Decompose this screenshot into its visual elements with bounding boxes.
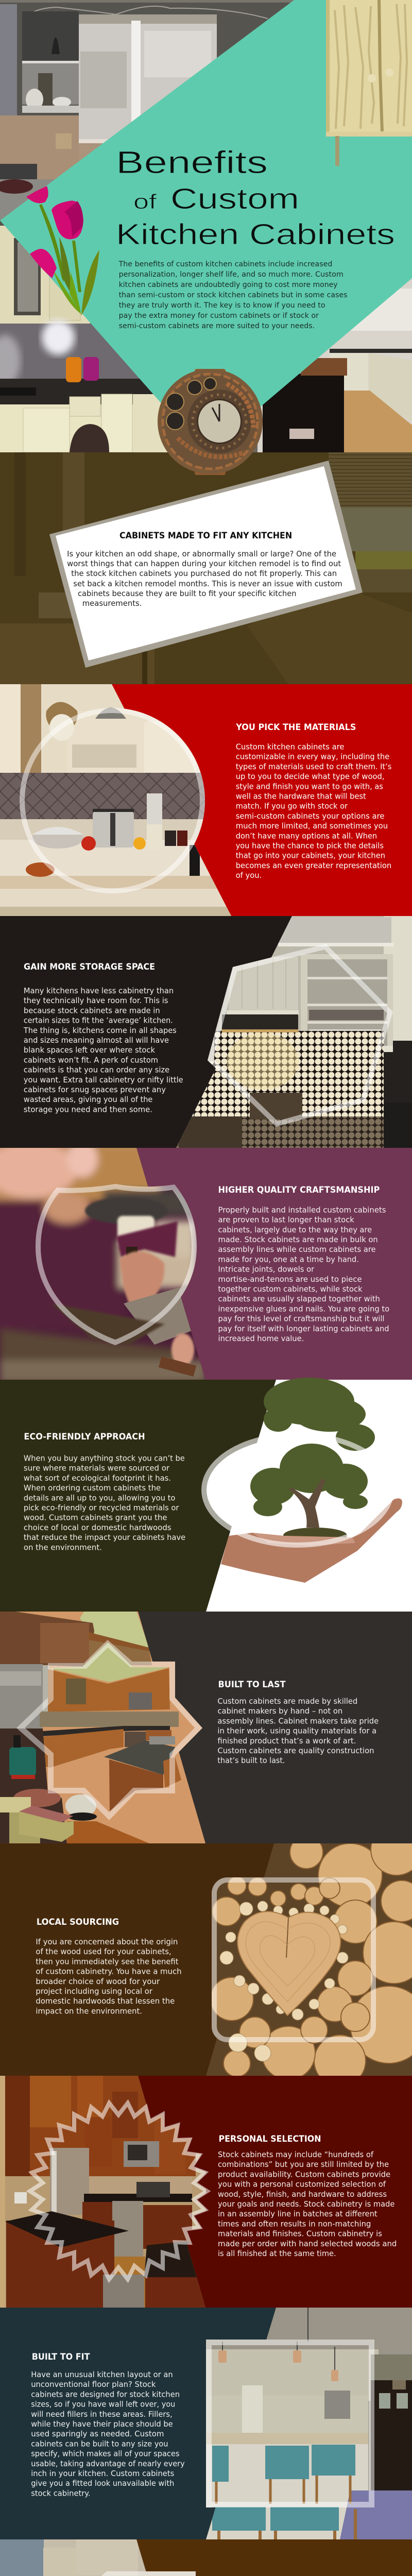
body text: cabinets are usually slapped together with (218, 1294, 380, 1303)
body text: are proven to last longer than stock (218, 1215, 354, 1225)
panel: local sourcing (0, 1843, 412, 2076)
body text: impact on the environment. (36, 2006, 142, 2015)
white photo background (206, 1380, 412, 1612)
body text: unconventional floor plan? Stock (31, 2380, 156, 2389)
panel: you pick the materials (0, 684, 412, 916)
card text: the stock kitchen cabinets you purchased do not fit properly. This can (71, 569, 337, 578)
ring (15, 2574, 193, 2576)
body text: of you. (236, 871, 262, 880)
ring fill (207, 1437, 389, 1543)
body text: blank spaces left over where stock (24, 1045, 155, 1055)
card text: set back a kitchen remodel months. This is never an issue with custom (73, 579, 342, 588)
body text: materials and finishes. Custom cabinetry is (218, 2229, 382, 2239)
heading: YOU PICK THE MATERIALS (235, 722, 356, 733)
body text: sizes, so if you have wall left over, you (31, 2400, 175, 2409)
body text (218, 1205, 389, 1343)
body text: domestic hardwoods that lessen the (36, 1996, 175, 2006)
intro text: The benefits of custom kitchen cabinets include increased (118, 260, 332, 268)
photo: cream kitchen with range hood (0, 2539, 206, 2576)
panel: cabinets made to fit (0, 452, 412, 684)
body text (24, 1454, 185, 1552)
panel: built to last (0, 1612, 412, 1843)
body text: product availability. Custom cabinets provide (218, 2170, 390, 2179)
intro text: pay the extra money for custom cabinets or if stock or (119, 312, 319, 320)
body text: choice of local or domestic hardwoods (24, 1523, 171, 1532)
panel: eco-friendly approach (0, 1378, 412, 1612)
card heading: CABINETS MADE TO FIT ANY KITCHEN (119, 531, 292, 541)
photo: cream cabinets, bottom left (0, 226, 170, 453)
background photo: tinted dining kitchen (0, 452, 412, 684)
body text: up to you to decide what type of wood, (236, 772, 384, 781)
ring (16, 1640, 202, 1820)
title: Benefits (116, 145, 268, 180)
body text: If you are concerned about the origin (36, 1937, 178, 1946)
body text: made. Stock cabinets are made in bulk on (218, 1235, 378, 1244)
body text: increased home value. (218, 1334, 304, 1343)
body text: storage you need and then some. (24, 1105, 152, 1114)
body text: Intricate joints, dowels or (218, 1265, 315, 1274)
body text: inexpensive glues and nails. You are going to (218, 1304, 389, 1313)
body text: pay for this level of craftsmanship but it will (218, 1314, 384, 1324)
body text: much more limited, and sometimes you (236, 821, 388, 831)
photo: bright kitchen with cookware (0, 684, 237, 916)
body text: because stock cabinets are made in (24, 1006, 160, 1015)
title (116, 145, 395, 251)
body text: details are all up to you, allowing you to (24, 1493, 175, 1502)
body text: cabinet makers by hand – not on (217, 1706, 342, 1716)
intro text: personalization, longer shelf life, and so much more. Custom (119, 270, 344, 279)
body text: inch in your kitchen. Custom cabinets (31, 2469, 174, 2478)
body text (31, 2370, 185, 2498)
body text: finished product that’s a work of art. (217, 1736, 356, 1745)
body text: becomes an even greater representation (236, 861, 391, 870)
card text: worst things that can happen during your kitchen remodel is to find out (67, 559, 341, 568)
body text: you with a personal customized selection of (218, 2180, 386, 2189)
icon: pink tulips (26, 186, 99, 315)
body text (217, 1697, 379, 1765)
body text: The thing is, kitchens come in all shapes (23, 1026, 177, 1035)
body text: in an assembly line in batches at different (218, 2209, 377, 2218)
photo: kitchen window, top left (0, 0, 309, 227)
panel: personal selection (0, 2076, 412, 2308)
body text: and sizes meaning almost all will have (24, 1036, 169, 1045)
body text: on the environment. (24, 1543, 102, 1552)
body text (218, 2150, 397, 2258)
photo: white kitchen, bottom right (258, 278, 412, 453)
photo: tree held in a hand (221, 1378, 402, 1583)
body text: what sort of ecological footprint it has. (24, 1473, 171, 1483)
body text: then you immediately see the benefit (36, 1957, 179, 1966)
body text: pick eco-friendly or recycled materials or (24, 1503, 179, 1513)
body text: will need fillers in these areas. Fillers, (31, 2410, 173, 2419)
card text (67, 549, 342, 608)
photo: kitchen island with teal stools (203, 2308, 412, 2539)
heading: ECO-FRIENDLY APPROACH (24, 1432, 145, 1442)
white card (49, 461, 363, 668)
body text: that’s built to last. (217, 1756, 285, 1765)
body text: cabinets won’t fit. A perk of custom (24, 1055, 158, 1064)
teal diamond panel (0, 0, 412, 453)
heading: LOCAL SOURCING (37, 1917, 119, 1927)
body text (23, 986, 183, 1114)
body text: Have an unusual kitchen layout or an (31, 2370, 173, 2379)
body text: Many kitchens have less cabinetry than (24, 986, 174, 995)
body text: Properly built and installed custom cabinets (218, 1205, 386, 1214)
icon: wooden wall cabinet (326, 0, 412, 166)
body text: assembly lines while custom cabinets are (218, 1245, 376, 1254)
body text: together custom cabinets, while stock (218, 1284, 363, 1294)
body text: style and finish you want to go with, as (236, 782, 383, 791)
body text: well as the hardware that will best (236, 791, 366, 801)
body text: of the wood used for your cabinets, (36, 1947, 171, 1956)
body text: Custom kitchen cabinets are (236, 742, 344, 751)
body text: certain sizes to fit the ‘average’ kitchen. (24, 1016, 173, 1025)
intro text: kitchen cabinets are undoubtedly going to cost more money (119, 281, 338, 289)
body text: made per order with hand selected woods and (218, 2239, 397, 2248)
title: Kitchen Cabinets (116, 218, 395, 251)
body text: cabinets is that you can order any size (24, 1065, 169, 1075)
body text: cabinets, largely due to the way they are (218, 1225, 372, 1234)
body text: used sparingly as needed. Custom (31, 2429, 164, 2438)
body text: made for you, one at a time by hand. (218, 1255, 359, 1264)
intro text (118, 260, 347, 330)
body text: mortise-and-tenons are used to piece (218, 1275, 362, 1284)
body text: semi-custom cabinets your options are (236, 811, 384, 821)
body text: assembly lines. Cabinet makers take pride (217, 1716, 379, 1725)
body text: wasted areas, giving you all of the (24, 1095, 152, 1104)
body text: your goals and needs. Stock cabinetry is made (218, 2199, 394, 2209)
body text: don’t have many options at all. When (236, 831, 377, 840)
ring (22, 710, 202, 891)
body text: that reduce the impact your cabinets have (24, 1533, 185, 1542)
heading: GAIN MORE STORAGE SPACE (24, 962, 155, 972)
heading: HIGHER QUALITY CRAFTSMANSHIP (218, 1185, 380, 1195)
photo: wood kitchen with island (0, 1612, 206, 1843)
heading: PERSONAL SELECTION (218, 2134, 321, 2144)
body text: Custom cabinets are quality construction (217, 1746, 374, 1755)
photo: cherry wood kitchen (0, 2076, 206, 2308)
body text: project including using local or (36, 1987, 153, 1996)
body text: you have the chance to pick the details (236, 841, 384, 850)
body text: Stock cabinets may include “hundreds of (218, 2150, 374, 2159)
body text: they technically have room for. This is (24, 996, 168, 1005)
body text: wood, style, finish, and hardware to address (218, 2190, 387, 2199)
heading: BUILT TO LAST (218, 1680, 286, 1690)
panel: higher quality craftsmanship (0, 1139, 412, 1386)
body text: stock cabinetry. (31, 2488, 91, 2498)
body text: while they have their place should be (31, 2419, 173, 2429)
icon: steampunk clock (158, 369, 263, 475)
card text: Is your kitchen an odd shape, or abnormally small or large? One of the (67, 549, 336, 558)
body text: in their work, using quality materials for a (217, 1726, 376, 1736)
body text: is all finished at the same time. (218, 2249, 336, 2258)
body text: cabinets can be built to any size you (31, 2439, 168, 2448)
body text: you want. Extra tall cabinetry or nifty little (24, 1075, 183, 1084)
body text: pay for itself with longer lasting cabinets and (218, 1324, 389, 1333)
panel: built to fit (0, 2308, 412, 2539)
title: of (133, 191, 157, 213)
body text: sure where materials were sourced or (24, 1464, 170, 1473)
body text: When ordering custom cabinets the (24, 1483, 161, 1493)
body text: When you buy anything stock you can’t be (24, 1454, 185, 1463)
body text: that go into your cabinets, your kitchen (236, 851, 385, 860)
intro text: they are truly worth it. The key is to know if you need to (119, 301, 325, 310)
body text: specify, which makes all of your spaces (31, 2449, 180, 2459)
body text (36, 1937, 182, 2015)
intro text: semi-custom cabinets are more suited to your needs. (119, 322, 315, 330)
body text: cabinets are designed for stock kitchen (31, 2389, 180, 2399)
body text: match. If you go with stock or (236, 802, 348, 811)
body text: of custom cabinetry. You have a much (36, 1967, 182, 1976)
ring (214, 1880, 373, 2040)
ring (204, 1435, 391, 1545)
intro text: than semi-custom or stock kitchen cabinets but in some cases (119, 291, 347, 299)
body text: types of materials used to craft them. It’s (236, 762, 391, 771)
body text: wood. Custom cabinets grant you the (24, 1513, 167, 1522)
body text: usable, taking advantage of nearly every (31, 2459, 185, 2468)
body text (236, 742, 391, 880)
panel: gain more storage space (0, 916, 412, 1148)
photo: shelves and dotted backsplash (175, 916, 412, 1148)
body text: give you a fitted look unavailable with (31, 2479, 174, 2488)
body text: times and often results in non-matching (218, 2219, 371, 2228)
card text: cabinets because they are built to fit your specific kitchen (78, 589, 297, 598)
panel: kitchen design with custom cabinetry (0, 2539, 412, 2576)
starburst ring (30, 2103, 207, 2279)
ring (36, 1184, 197, 1345)
photo: log pile with heart (206, 1843, 412, 2076)
ring (209, 2342, 372, 2505)
title: Custom (170, 182, 299, 215)
photo: hands with hammer and chisel (0, 1139, 206, 1386)
heading: BUILT TO FIT (32, 2352, 90, 2362)
body text: broader choice of wood for your (36, 1977, 160, 1986)
body text: customizable in every way, including the (236, 752, 389, 761)
body text: cabinets for snug spaces prevent any (24, 1085, 166, 1094)
card text: measurements. (82, 599, 142, 608)
panel: hero (0, 0, 412, 453)
body text: combinations” but you are still limited by the (218, 2160, 389, 2169)
ring (208, 944, 393, 1127)
body text: Custom cabinets are made by skilled (217, 1697, 357, 1706)
